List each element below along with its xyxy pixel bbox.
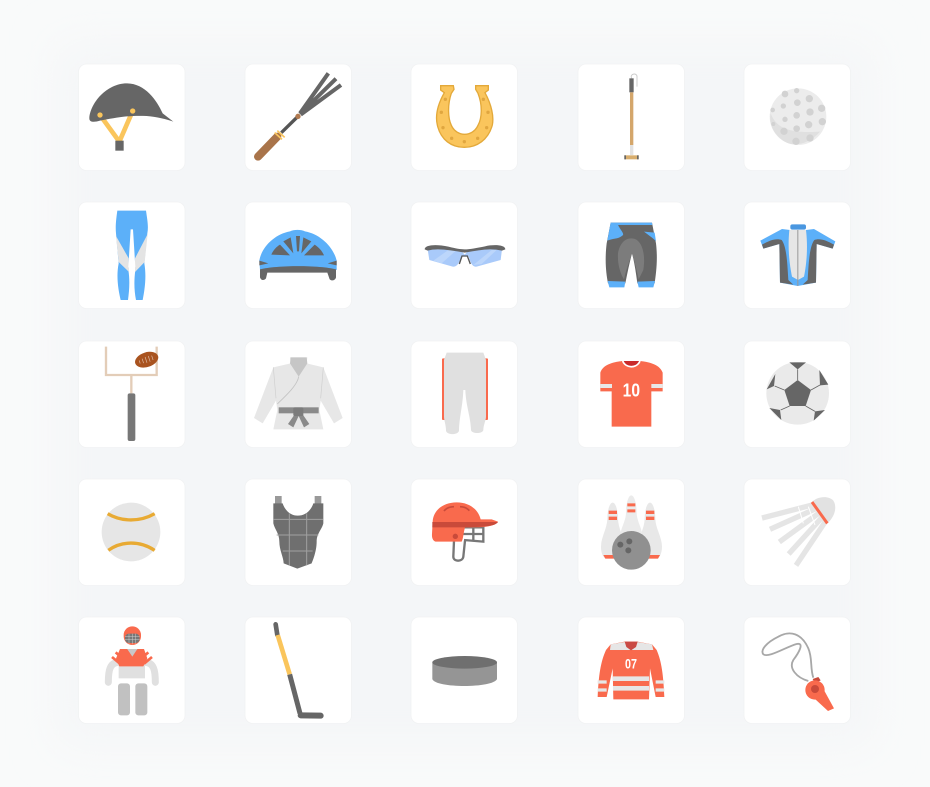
- icon: shuttlecock: [762, 497, 835, 565]
- icon: baseball: [102, 503, 160, 561]
- icon: hockey stick: [276, 624, 321, 716]
- panel: bike helmet card: [245, 202, 352, 308]
- icon: hockey puck: [432, 656, 497, 686]
- icon: goal post and football: [106, 347, 160, 441]
- panel: riding crop card: [245, 64, 352, 170]
- panel: football pants card: [411, 341, 518, 448]
- panel: hockey puck card: [411, 617, 518, 724]
- icon: polo mallet: [624, 74, 639, 159]
- icon: whistle on lanyard: [762, 633, 834, 711]
- panel: goal post card: [78, 341, 185, 448]
- panel: horseshoe card: [411, 64, 518, 170]
- icon: chest protector: [273, 496, 323, 569]
- panel: martial arts gi card: [245, 341, 352, 448]
- panel: baseball card: [78, 479, 185, 586]
- icon: horseshoe: [437, 86, 493, 147]
- panel: whistle card: [744, 617, 850, 724]
- panel: batting helmet card: [411, 479, 518, 586]
- icon: martial arts gi: [254, 357, 343, 429]
- icon: cycling jersey: [760, 224, 835, 286]
- icon: bike helmet: [259, 230, 337, 280]
- panel: riding helmet card: [78, 64, 185, 170]
- panel: shuttlecock card: [744, 479, 850, 586]
- icon: batting helmet: [432, 502, 498, 561]
- panel: cycling tights card: [78, 202, 185, 308]
- icon: golf ball: [770, 88, 826, 145]
- icon: hockey jersey number 07: 07: [625, 655, 637, 671]
- icon: hockey player: [108, 626, 155, 715]
- panel: soccer ball card: [744, 341, 850, 448]
- icon: riding helmet: [89, 83, 173, 151]
- icon: cycling shorts: [606, 223, 657, 287]
- panel: chest protector card: [245, 479, 352, 586]
- icon: soccer ball: [766, 362, 829, 425]
- panel: football shirt card: [578, 341, 684, 448]
- icon: cycling tights: [116, 211, 148, 300]
- panel: cycling shorts card: [578, 202, 684, 308]
- panel: bowling card: [578, 479, 684, 586]
- icon: sports glasses: [425, 245, 505, 267]
- panel: polo mallet card: [578, 64, 684, 170]
- panel: hockey jersey card: [578, 617, 684, 724]
- icon: bowling pins and ball: [601, 495, 662, 570]
- panel: golf ball card: [744, 64, 850, 170]
- panel: cycling jersey card: [744, 202, 850, 308]
- icon: red football shirt number 10: 10: [623, 380, 640, 401]
- panel: sports glasses card: [411, 202, 518, 308]
- icon: football pants: [442, 353, 488, 434]
- panel: hockey player card: [78, 617, 185, 724]
- icon: riding crop: [258, 73, 341, 157]
- panel: hockey stick card: [245, 617, 352, 724]
